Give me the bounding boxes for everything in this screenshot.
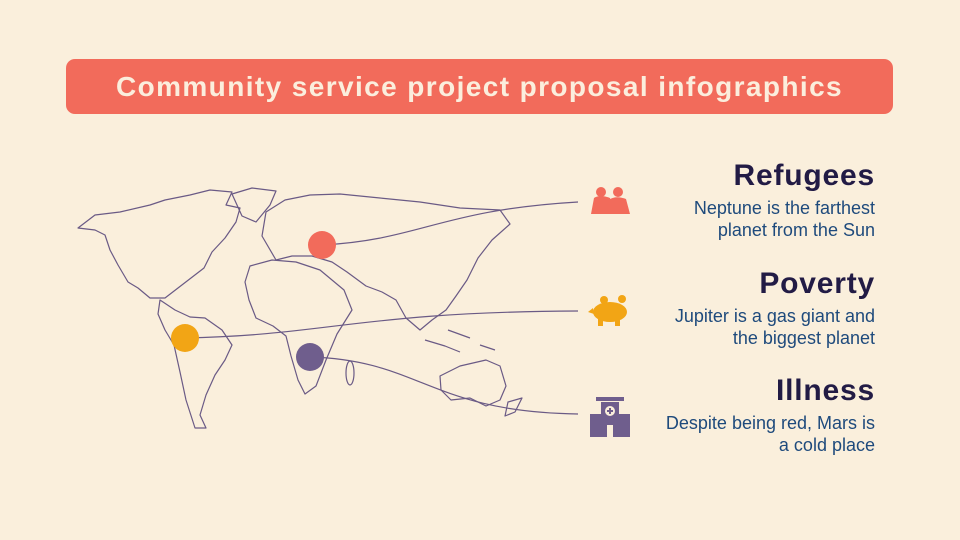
text: poverty: the biggest planet (733, 328, 875, 348)
text: refugees: planet from the Sun (718, 220, 875, 240)
text: illness: a cold place (779, 435, 875, 455)
text: poverty: Poverty (759, 267, 875, 300)
connector lines (185, 202, 578, 414)
text: poverty (675, 267, 875, 348)
map dots (171, 231, 336, 371)
icon: illness hospital (590, 397, 630, 437)
text: illness: Illness (776, 374, 875, 407)
text: poverty: Jupiter is a gas giant and (675, 306, 875, 326)
icon: refugees (591, 187, 630, 214)
title (66, 59, 893, 114)
text: refugees: Neptune is the farthest (694, 198, 875, 218)
text: illness: Despite being red, Mars is (666, 413, 875, 433)
icon: poverty piggy bank (588, 295, 627, 326)
text: illness (666, 374, 875, 455)
text: refugees: Refugees (734, 159, 875, 192)
text: refugees (694, 159, 875, 240)
title: Community service project proposal infographics (116, 71, 843, 102)
